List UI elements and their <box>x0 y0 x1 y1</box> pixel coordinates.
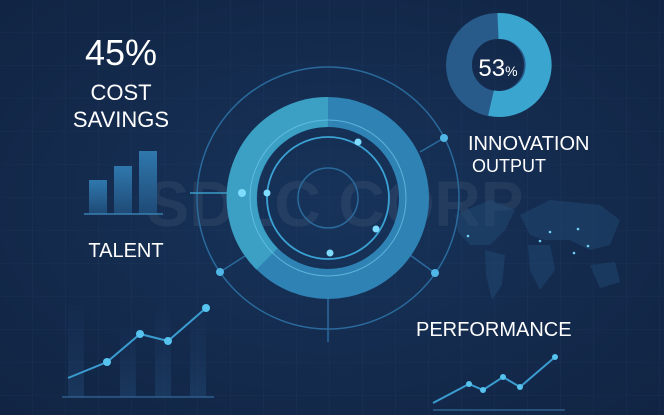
stat: cost savings: COST <box>90 80 152 105</box>
label: innovation output: INNOVATION <box>468 133 589 155</box>
pie chart 53% <box>459 26 539 104</box>
stat: cost savings: SAVINGS <box>73 107 169 132</box>
label: innovation output: OUTPUT <box>472 156 546 176</box>
stat: cost savings <box>73 32 169 132</box>
label: innovation output <box>468 133 589 176</box>
stat: cost savings: 45% <box>85 32 157 73</box>
bar chart icon <box>84 151 163 214</box>
main ring chart <box>190 67 459 342</box>
pie chart 53%: 53% <box>478 55 518 82</box>
label: performance: PERFORMANCE <box>416 319 572 341</box>
watermark: SDLC CORP <box>147 168 523 240</box>
label: talent: TALENT <box>88 240 164 262</box>
world map <box>455 200 620 300</box>
line chart bottom-right <box>433 354 565 410</box>
line chart bottom-left <box>62 304 214 397</box>
map lights <box>467 228 589 254</box>
